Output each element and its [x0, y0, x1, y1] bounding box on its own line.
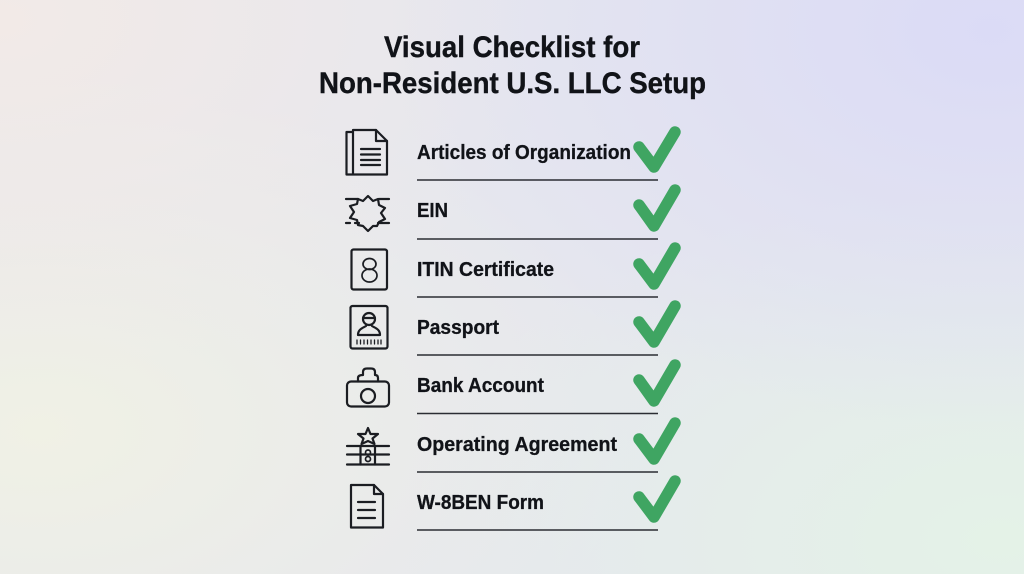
check mark [639, 190, 675, 226]
label: Operating Agreement [417, 433, 617, 456]
row: Articles of Organization [346, 130, 675, 180]
icon: passport photo [350, 306, 388, 348]
divider [417, 529, 658, 531]
divider [417, 471, 658, 473]
label: Bank Account [417, 374, 544, 397]
title [319, 31, 706, 100]
label: W-8BEN Form [417, 491, 544, 514]
check mark [639, 423, 675, 459]
icon: star and seal [347, 428, 389, 464]
title: Visual Checklist for [384, 31, 640, 64]
check mark [639, 248, 675, 284]
title: Non-Resident U.S. LLC Setup [319, 67, 706, 100]
row: ITIN Certificate [352, 248, 675, 297]
row: EIN [346, 190, 675, 239]
check mark [639, 481, 675, 517]
divider [417, 179, 658, 181]
icon: ITIN card [352, 250, 387, 290]
row: Bank Account [347, 365, 675, 414]
divider [417, 354, 658, 356]
row: W-8BEN Form [351, 481, 675, 530]
label: Articles of Organization [417, 141, 631, 164]
label: EIN [417, 199, 448, 222]
label: ITIN Certificate [417, 258, 554, 281]
divider [417, 238, 658, 240]
check mark [639, 365, 675, 401]
divider [417, 412, 658, 414]
check mark [639, 306, 675, 342]
icon: bank camera box [347, 368, 389, 406]
divider [417, 296, 658, 298]
icon: form document [351, 485, 383, 528]
icon: seal burst [346, 196, 389, 231]
check mark [639, 132, 675, 167]
row: Passport [350, 306, 675, 355]
label: Passport [417, 316, 499, 339]
icon: stacked document [346, 130, 387, 174]
row: Operating Agreement [347, 423, 675, 472]
